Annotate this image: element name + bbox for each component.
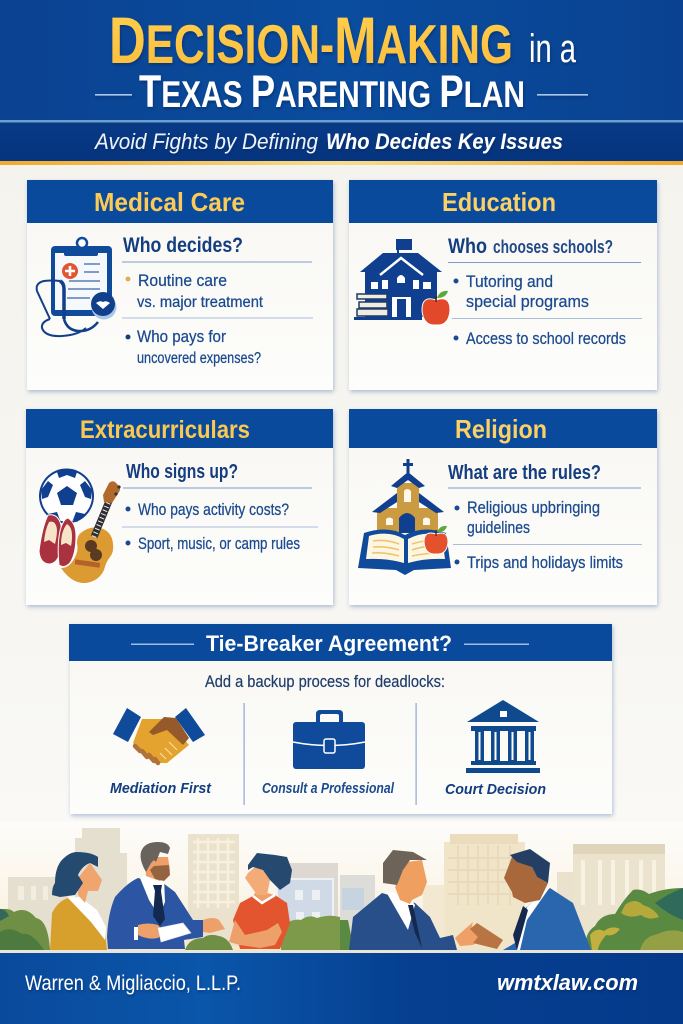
bullet: camp rules: Sport, music, or camp rules	[138, 535, 300, 553]
icon: church and open book	[358, 459, 451, 575]
website: wmtxlaw.com	[497, 970, 638, 995]
text: who chooses schools	[448, 235, 613, 258]
subtitle	[93, 129, 563, 154]
icon: briefcase	[293, 710, 365, 769]
panel: religion	[349, 409, 657, 605]
heading: education: Education	[442, 187, 556, 217]
label: court decision: Court Decision	[445, 781, 546, 798]
bullet: religious upbringing	[454, 499, 600, 537]
bullet: activity costs: Who pays activity costs?	[138, 501, 289, 519]
footer band	[0, 950, 683, 1024]
bullet: uncovered expenses: Who pays for	[137, 327, 226, 346]
panel: medical care	[27, 180, 333, 390]
title line 2: TEXAS PARENTING PLAN	[139, 66, 525, 117]
bullet: religious upbringing: Religious upbringing	[467, 499, 600, 517]
label: consult a professional: Consult a Professional	[262, 781, 395, 797]
bullet: uncovered expenses	[126, 327, 261, 367]
bullet: uncovered expenses: uncovered expenses?	[137, 350, 261, 367]
icon: school with books and apple	[354, 239, 450, 325]
panel: tie-breaker agreement	[69, 624, 612, 814]
bullet: religious upbringing: guidelines	[467, 519, 530, 537]
label: mediation first: Mediation First	[110, 780, 212, 797]
bullet: trips and holidays: Trips and holidays limits	[467, 554, 623, 572]
bullet: routine care: Routine care	[138, 271, 227, 290]
icon: soccer ball, shoes and guitar	[39, 468, 121, 583]
figure: woman in yellow jacket	[50, 852, 107, 950]
firm name: Warren & Migliaccio, L.L.P.	[25, 972, 241, 995]
heading: tie-breaker agreement: Tie-Breaker Agreement?	[206, 631, 452, 656]
header banner	[0, 0, 683, 165]
figure: woman in red shirt with crossed arms	[229, 853, 292, 949]
bullet: tutoring: special programs	[466, 292, 589, 311]
panel: education	[349, 180, 657, 390]
figure: man in navy suit shaking hands	[349, 850, 487, 950]
heading: medical care: Medical Care	[94, 187, 245, 217]
text: who decides: Who decides?	[123, 234, 243, 257]
icon: handshake	[113, 708, 205, 763]
subtitle: Who Decides Key Issues	[326, 129, 563, 154]
bullet: routine care	[126, 271, 264, 311]
bullet: tutoring	[454, 272, 589, 311]
figure: man in blue suit with document	[107, 842, 225, 949]
heading: religion: Religion	[455, 414, 547, 444]
heading: extracurriculars: Extracurriculars	[80, 416, 250, 444]
illustration: trees	[0, 888, 683, 950]
text: who chooses schools: chooses schools?	[493, 237, 613, 257]
illustration: city skyline background	[0, 822, 683, 952]
bullet: school records: Access to school records	[466, 329, 626, 348]
icon: courthouse	[466, 700, 540, 773]
text: what are the rules: What are the rules?	[448, 462, 601, 484]
text: backup process: Add a backup process for deadlocks:	[205, 672, 445, 691]
icon: clipboard and stethoscope	[37, 238, 116, 336]
title line 1: in a	[529, 27, 577, 71]
panel: extracurriculars	[26, 409, 333, 605]
text: who signs up: Who signs up?	[126, 461, 238, 483]
bullet: routine care: vs. major treatment	[137, 294, 264, 311]
figure: man in blue suit shaking hands, right	[470, 849, 591, 950]
bullet: tutoring: Tutoring and	[466, 272, 553, 291]
title line 1: DECISION-MAKING	[109, 3, 513, 77]
subtitle: Avoid Fights by Defining	[93, 129, 319, 154]
text: who chooses schools: Who	[448, 235, 487, 258]
